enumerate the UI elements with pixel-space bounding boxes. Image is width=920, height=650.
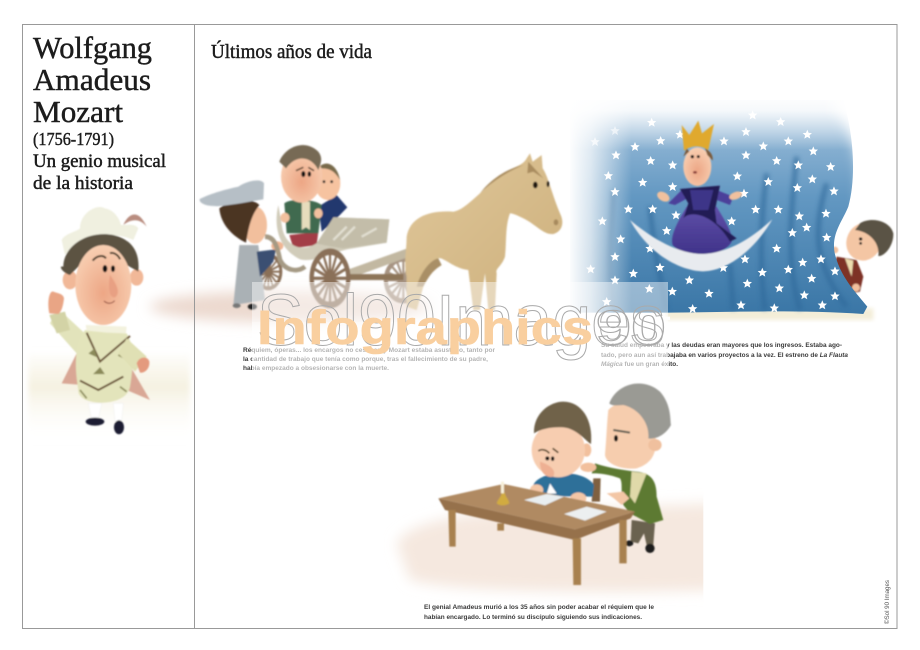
face [243, 206, 267, 244]
horse nostril [554, 219, 558, 225]
peeking boy [832, 217, 893, 293]
floor glow [397, 503, 717, 592]
teacher wig [609, 383, 671, 439]
watermark: Infographics90: 90 [596, 302, 666, 355]
skirt [672, 207, 732, 255]
character: Mozart with hat [48, 207, 150, 434]
head [75, 245, 131, 325]
crown [682, 121, 714, 151]
queen of the night [630, 121, 772, 271]
teacher legs [631, 520, 655, 545]
panel: left sidebar scene [28, 207, 190, 443]
Mozart in carriage [279, 145, 347, 248]
text block: health and debts: Su salud empeoraba y las deudas eran mayores que los ingresos. Estaba ago- [601, 342, 842, 349]
body [833, 257, 863, 293]
hair [855, 220, 893, 256]
tunic [76, 330, 133, 403]
legs [88, 403, 123, 422]
far wheel [386, 259, 421, 301]
coat [233, 245, 265, 305]
title: de la historia [33, 174, 133, 194]
sleeve [257, 249, 276, 277]
moon [630, 219, 772, 271]
hair [279, 145, 321, 170]
text block: health and debts [601, 342, 848, 368]
credit: ©Sol 90 Images [884, 580, 891, 624]
hat [199, 180, 264, 206]
floor shadow [667, 308, 873, 320]
collar [86, 325, 127, 333]
brows [296, 167, 314, 171]
ears [63, 271, 77, 289]
head [683, 147, 711, 186]
table top [438, 484, 635, 529]
curtain [570, 100, 867, 314]
watermark band [252, 282, 668, 322]
arms [668, 188, 733, 205]
nose [109, 275, 118, 297]
eyes [301, 171, 305, 177]
front wheel [312, 252, 348, 305]
carriage body [277, 205, 389, 260]
cape [62, 350, 150, 400]
title: Mozart [33, 94, 123, 129]
stars [586, 110, 840, 313]
watermark: Infographics90: Infographics [257, 302, 593, 355]
boy body [318, 195, 347, 232]
text block: health and debts: Mágica fue un gran éxito. [601, 361, 678, 368]
eyes [859, 237, 862, 241]
student [533, 473, 594, 497]
student eyes [545, 456, 549, 460]
servant [199, 180, 283, 310]
title: Amadeus [33, 62, 151, 97]
watermark: Sol90Images: Sol90Images [257, 281, 665, 361]
hair [219, 200, 259, 243]
student face [532, 423, 585, 477]
floor glow [150, 291, 430, 323]
hat [62, 207, 138, 255]
horse far leg [417, 258, 442, 287]
panel: composing scene [397, 383, 717, 592]
torso [284, 200, 322, 233]
table legs [448, 510, 627, 585]
title: Wolfgang [33, 30, 152, 65]
text block: health and debts: tado, pero aun así trabajaba en varios proyectos a la vez. El estreno de La Flauta [601, 352, 848, 359]
eyes [103, 265, 107, 272]
hand [271, 241, 283, 251]
title: (1756-1791) [33, 129, 114, 150]
teacher hand [607, 492, 629, 505]
title: Un genio musical [33, 152, 166, 172]
student hands [530, 484, 543, 496]
head [281, 151, 322, 203]
eyes [691, 155, 694, 158]
other arm [118, 338, 147, 372]
teacher coat [592, 463, 663, 524]
text block: requiem: la cantidad de trabajo que tenía como porque, tras el fallecimiento de su padre, [243, 356, 488, 363]
shoes [233, 303, 241, 308]
shafts [347, 245, 418, 278]
teacher face [605, 403, 656, 469]
title [33, 30, 166, 194]
table edge [438, 498, 635, 540]
back wheel [256, 255, 281, 288]
curtain folds [609, 157, 847, 310]
curtain fade [568, 90, 890, 320]
panel: curtain scene [568, 90, 893, 320]
horse eyes [533, 182, 538, 188]
raised arm [50, 315, 88, 353]
text block: requiem: Réquiem, óperas... los encargos no cesaban y Mozart estaba asustado, tanto por [243, 347, 496, 354]
bodice [680, 186, 737, 242]
teacher ear [648, 439, 662, 451]
mouth [693, 171, 697, 174]
horse [405, 153, 562, 310]
head [840, 217, 888, 266]
chair [592, 478, 601, 502]
mouth [104, 301, 115, 303]
hands [832, 247, 838, 253]
boy head [315, 167, 340, 200]
text block: death [424, 604, 654, 621]
text block: requiem: había empezado a obsesionarse con la muerte. [243, 365, 389, 372]
hair [683, 148, 713, 161]
text block: requiem [243, 347, 496, 372]
panel: carriage scene [150, 145, 562, 323]
brows [93, 253, 120, 261]
horse mane [480, 162, 543, 193]
paper [524, 494, 564, 505]
heading: Últimos años de vida: Últimos años de vida [211, 39, 372, 63]
shoes [86, 418, 104, 426]
red legs [289, 232, 318, 248]
text block: death: El genial Amadeus murió a los 35 años sin poder acabar el réquiem que le [424, 604, 654, 611]
hair [61, 234, 139, 275]
student hair [534, 402, 591, 444]
student nose [540, 462, 554, 477]
student ears [582, 443, 591, 457]
text block: death: habían encargado. Lo terminó su discípulo siguiendo sus indicaciones. [424, 614, 642, 621]
candle [497, 493, 509, 505]
hands [655, 190, 671, 204]
hands [280, 213, 290, 223]
teacher eye [614, 435, 618, 442]
floor glow [28, 350, 190, 443]
